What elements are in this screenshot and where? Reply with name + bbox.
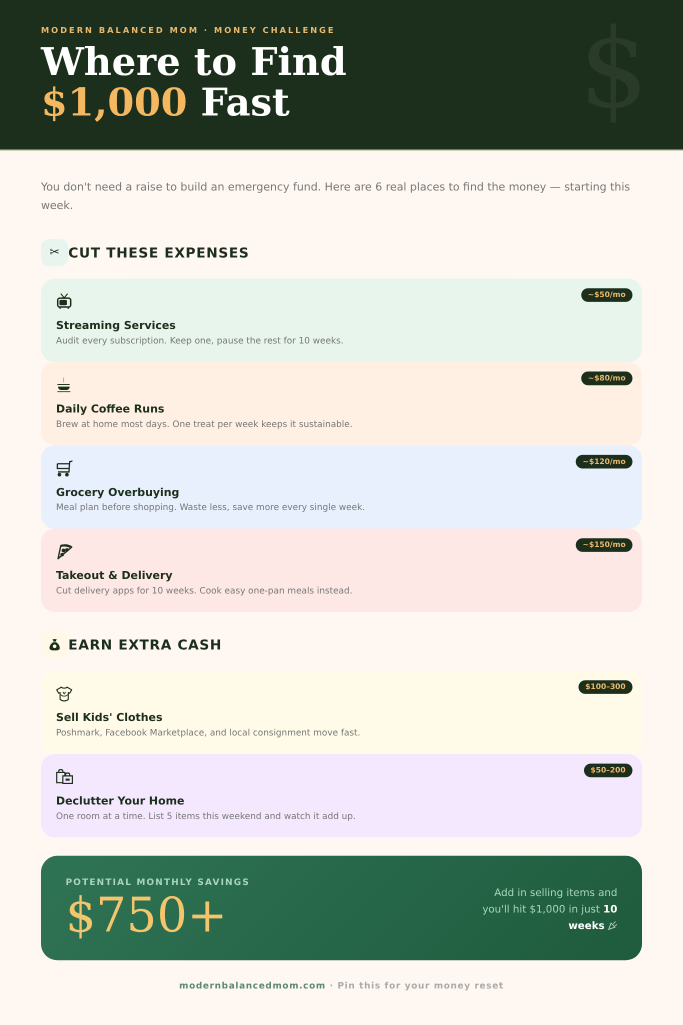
amount badge: $50–200 — [590, 766, 626, 775]
icon: scissors badge: ✂ — [49, 245, 60, 260]
card description: Brew at home most days. One treat per week keeps it sustainable. — [56, 419, 353, 430]
amount badge — [581, 372, 632, 385]
amount badge — [578, 680, 632, 694]
savings label: POTENTIAL MONTHLY SAVINGS — [66, 877, 250, 888]
amount badge — [576, 455, 632, 469]
amount badge: ~$50/mo — [588, 290, 626, 299]
icon: pizza — [57, 544, 72, 560]
card title: Daily Coffee Runs — [56, 402, 164, 415]
heading: earn extra cash: EARN EXTRA CASH — [68, 637, 222, 653]
card title: Grocery Overbuying — [56, 486, 179, 499]
heading: cut these expenses: CUT THESE EXPENSES — [68, 245, 249, 261]
icon: faint dollar sign: $ — [579, 5, 649, 133]
card: daily coffee runs — [41, 362, 642, 445]
card description: Meal plan before shopping. Waste less, save more every single week. — [56, 503, 365, 513]
amount badge: ~$120/mo — [583, 457, 626, 466]
title: $1,000 Fast — [41, 80, 290, 125]
title: Where to Find — [41, 40, 347, 85]
card title: Takeout & Delivery — [56, 569, 172, 582]
card description: One room at a time. List 5 items this weekend and watch it add up. — [56, 811, 356, 822]
icon: scissors badge — [41, 239, 68, 266]
icon: television — [56, 293, 72, 309]
card: streaming services — [41, 279, 642, 362]
card description: Poshmark, Facebook Marketplace, and local consignment move fast. — [56, 728, 360, 738]
card title: Sell Kids' Clothes — [56, 711, 162, 724]
panel: potential monthly savings — [41, 856, 642, 960]
amount badge: ~$150/mo — [583, 540, 626, 549]
header eyebrow: MODERN BALANCED MOM · MONEY CHALLENGE — [41, 25, 336, 35]
card description: Cut delivery apps for 10 weeks. Cook easy one-pan meals instead. — [56, 586, 352, 596]
savings note: Add in selling items and you'll hit $1,000 in just 10 weeks — [482, 886, 617, 931]
icon: shopping cart — [56, 460, 72, 476]
icon: clothes — [56, 686, 72, 702]
icon: money bag badge — [41, 631, 68, 658]
card: declutter your home — [41, 754, 642, 837]
amount badge: $100–300 — [585, 682, 626, 691]
header band — [0, 0, 683, 151]
savings amount: $750+ — [66, 887, 227, 943]
card: grocery overbuying — [41, 445, 642, 529]
title — [40, 40, 347, 125]
icon: coffee — [57, 378, 70, 392]
intro text: You don't need a raise to build an emergency fund. Here are 6 real places to find the money — starting this week. — [41, 180, 630, 212]
card: takeout and delivery — [41, 529, 642, 612]
card: sell kids clothes — [41, 671, 642, 754]
footer: modernbalancedmom.com · Pin this for your money reset — [179, 980, 504, 991]
card title: Streaming Services — [56, 319, 176, 332]
amount badge — [581, 288, 632, 302]
amount badge — [576, 538, 632, 552]
amount badge — [584, 764, 632, 777]
card description: Audit every subscription. Keep one, pause the rest for 10 weeks. — [56, 336, 344, 346]
card title: Declutter Your Home — [56, 794, 184, 807]
amount badge: ~$80/mo — [588, 374, 626, 382]
icon: shopping bags — [56, 769, 73, 784]
